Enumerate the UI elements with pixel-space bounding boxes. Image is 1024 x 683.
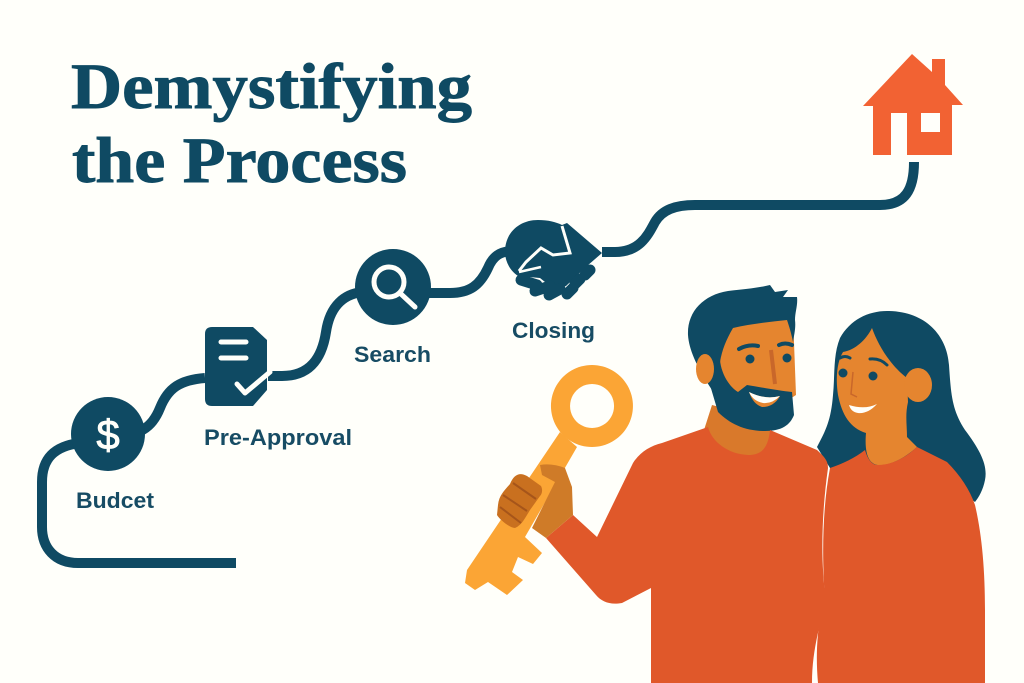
winding path	[42, 162, 914, 563]
man shirt and arm	[546, 427, 828, 683]
title	[71, 51, 472, 197]
man features	[739, 344, 792, 407]
woman face	[837, 328, 917, 465]
title: the Process	[72, 125, 407, 197]
man beard	[710, 360, 794, 431]
icon: house	[863, 54, 963, 155]
icon: budget dollar: $	[96, 411, 120, 458]
man neck	[704, 405, 770, 458]
key	[465, 365, 633, 595]
man face	[715, 316, 796, 428]
icon: closing handshake	[505, 220, 602, 295]
icon: search magnifier	[355, 249, 431, 325]
icon: budget dollar	[71, 397, 145, 471]
man	[546, 285, 828, 683]
step labels: Budcet	[76, 488, 155, 513]
step labels: Search	[354, 342, 431, 367]
step labels: Closing	[512, 318, 595, 343]
man hair	[688, 285, 797, 390]
woman hair	[817, 311, 986, 502]
woman features	[838, 356, 887, 413]
icon: pre-approval document	[205, 327, 270, 406]
title: Demystifying	[71, 51, 472, 123]
woman	[817, 311, 986, 683]
step labels: Pre-Approval	[204, 425, 352, 450]
woman shirt	[817, 447, 985, 683]
step labels	[76, 318, 595, 513]
hand holding key	[497, 464, 573, 538]
man ear	[696, 354, 714, 384]
